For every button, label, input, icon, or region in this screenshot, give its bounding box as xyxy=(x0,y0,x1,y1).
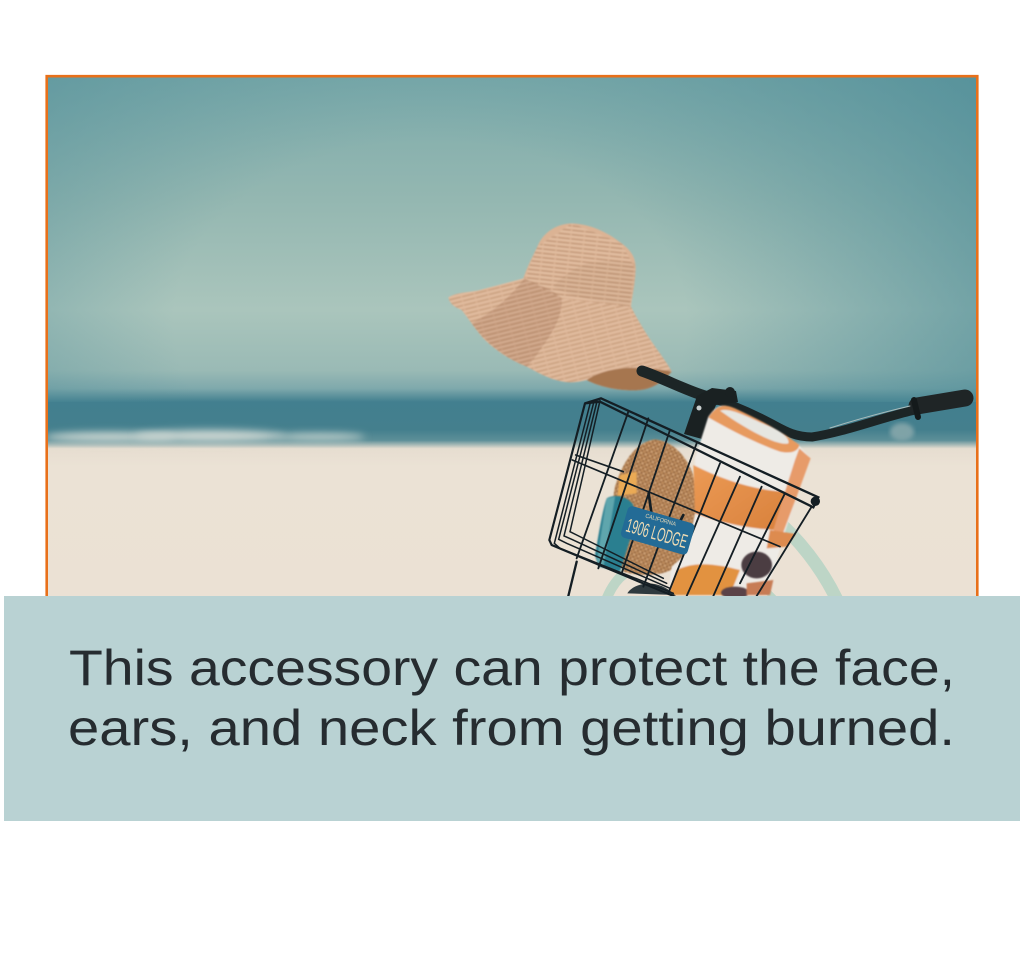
caption line 1: This accessory can protect the face, xyxy=(69,640,955,696)
icon: wire basket xyxy=(549,398,820,597)
photo frame: orange border xyxy=(47,76,977,596)
icon: sunglasses xyxy=(721,552,773,599)
icon: bicycle frame xyxy=(602,522,842,596)
icon: handlebar and grip xyxy=(642,371,965,437)
icon: rolled striped towel xyxy=(668,406,811,595)
caption panel xyxy=(4,596,1020,821)
caption line 2: ears, and neck from getting burned. xyxy=(68,700,955,756)
plate text: California: CALIFORNIA xyxy=(644,514,677,528)
caption background xyxy=(4,596,1020,821)
icon: woven hat in basket xyxy=(612,439,697,575)
icon: basket items shadow xyxy=(627,583,675,595)
icon: orange bottle xyxy=(617,472,637,496)
hat body xyxy=(448,222,672,384)
icon: sun hat xyxy=(443,220,677,397)
icon: blue bottle xyxy=(595,496,633,572)
photo: sky, sea and sand backdrop xyxy=(45,77,977,596)
photo: beach with hat on bicycle xyxy=(45,77,977,602)
hat underside xyxy=(594,373,670,391)
icon: handlebar clamp xyxy=(684,387,738,439)
plate text: 1906 Lodge: 1906 LODGE xyxy=(624,516,690,553)
license plate xyxy=(620,505,696,556)
